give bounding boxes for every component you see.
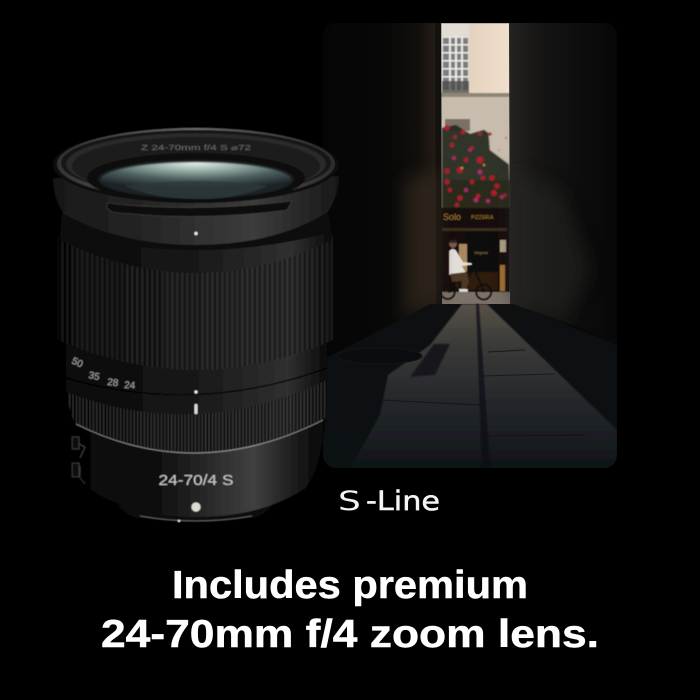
- smooth zoom index band: [66, 335, 327, 414]
- zoom scale numbers: 28: [107, 377, 119, 389]
- zoom scale numbers: 24: [124, 380, 136, 392]
- zoom index marks: [194, 390, 198, 394]
- lens product shot: [53, 127, 339, 522]
- engraved lens name: Z 24-70mm f/4 S ⌀72: [141, 145, 251, 152]
- right wall: [509, 23, 566, 320]
- zoom scale numbers: 50: [70, 356, 85, 371]
- S-Line logo: S: [338, 486, 361, 517]
- flowers: [442, 125, 510, 210]
- focal switch markings: [72, 437, 85, 484]
- headline: Includes premium: [172, 564, 528, 607]
- fine ribbed control ring: [67, 370, 327, 452]
- flange with filter thread: [53, 176, 339, 245]
- shop front: Original: [474, 250, 488, 255]
- black front band: [60, 210, 332, 250]
- manhole cover: [338, 348, 422, 364]
- sunlit strip on the paving: [350, 304, 617, 468]
- rear bayonet flange: [118, 505, 272, 522]
- shop front: Solo: [443, 212, 461, 222]
- S-Line logo: -Line: [366, 486, 440, 517]
- alley floor: [323, 304, 617, 468]
- S-Line logo: [338, 486, 440, 517]
- index dot: [194, 232, 198, 235]
- zoom scale numbers: [70, 356, 136, 392]
- headline: [101, 564, 599, 656]
- shop front: PIZZERIA: [471, 215, 494, 221]
- inner barrel: [87, 153, 305, 203]
- photo: cyclist in a dark alley: [323, 23, 617, 468]
- zoom scale numbers: 35: [87, 370, 101, 383]
- large ribbed zoom ring: [58, 236, 333, 370]
- mount index dot: [191, 502, 201, 512]
- shop front: [441, 208, 510, 306]
- sky-lit building facade: [441, 23, 510, 308]
- mount section: [70, 405, 325, 517]
- front rim: [53, 127, 339, 203]
- lens model name: 24-70/4 S: [158, 472, 234, 489]
- left wall: [414, 23, 436, 308]
- cyclist: [441, 240, 491, 300]
- headline: 24-70mm f/4 zoom lens.: [101, 613, 599, 656]
- glass element: [100, 162, 292, 198]
- textured collar: [60, 232, 332, 273]
